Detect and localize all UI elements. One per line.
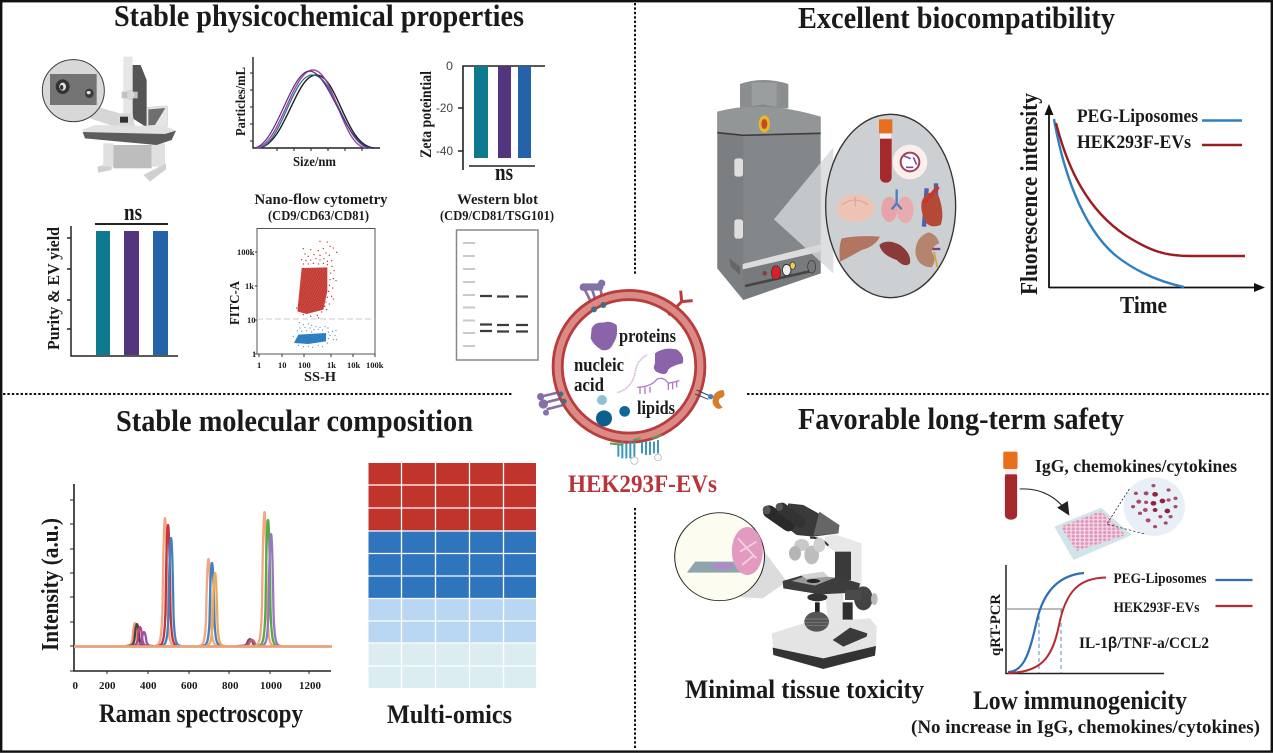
chart: nano-flow cytometry scatter: 100k [237,247,255,257]
central element: HEK293F extracellular vesicle: acid [574,375,604,396]
central element: HEK293F extracellular vesicle: lipids [637,398,675,419]
central element: HEK293F extracellular vesicle: HEK293F-EVs [568,471,717,498]
icon: light microscope [763,503,878,669]
transmembrane proteins: bottom [610,435,662,464]
chart: qRT-PCR amplification curves: HEK293F-EVs [1114,600,1200,616]
chart: western blot [440,192,554,360]
chart: zeta potential bars: -40 [436,144,453,158]
chart: nano-flow cytometry scatter: 100k [366,360,384,370]
protein blob 1 [591,322,617,350]
heading: stable molecular composition: Stable molecular composition [116,403,473,438]
receptor anchors [558,302,606,404]
chart: zeta potential bars [418,59,545,186]
chart: purity and EV yield bars [44,200,178,356]
chart: particle size distribution: Size/nm [293,155,336,170]
chart: western blot: (CD9/CD81/TSG101) [440,208,554,223]
chart: multi-omics heatmap: Multi-omics [387,700,512,729]
chart: nano-flow cytometry scatter: 10 [278,360,286,370]
chart: nano-flow cytometry scatter: FITC-A [228,280,243,325]
chart: raman spectroscopy: Raman spectroscopy [99,699,303,728]
chart: qRT-PCR amplification curves [988,565,1252,674]
chart: nano-flow cytometry scatter: Nano-flow cytometry [254,192,388,208]
chart: fluorescence intensity decay: PEG-Liposomes [1077,107,1198,127]
chart: nano-flow cytometry scatter: (CD9/CD63/CD81) [268,208,369,223]
chart: western blot: Western blot [457,192,538,208]
chart: nano-flow cytometry scatter: 10 [247,315,256,325]
chart: multi-omics heatmap [368,463,536,729]
receptor: top left [580,280,605,310]
chart: zeta potential bars: Zeta poteintial [418,71,435,158]
chart: purity and EV yield bars: Purity & EV yield [44,226,63,350]
chart: raman spectroscopy: 0 [72,680,78,692]
chart: nano-flow cytometry scatter: 1k [327,360,336,370]
caption: low immunogenicity: Low immunogenicity [973,686,1187,715]
RNA hairpin [637,378,679,394]
caption: minimal tissue toxicity: Minimal tissue toxicity [685,675,924,704]
chart: zeta potential bars: 0 [446,59,453,73]
lipid droplets [596,395,630,426]
icon: electron microscope with particle inset [42,57,176,182]
chart: fluorescence intensity decay [1017,93,1265,319]
chart: fluorescence intensity decay: HEK293F-EVs [1077,133,1191,153]
heading: excellent biocompatibility: Excellent biocompatibility [798,0,1115,35]
chart: raman spectroscopy: 1200 [299,680,322,692]
chart: raman spectroscopy: Intensity (a.u.) [38,518,64,651]
central element: HEK293F extracellular vesicle: nucleic [574,355,624,376]
nucleic acid strand [617,355,647,393]
icon: in vivo imaging machine with organs inset [717,80,956,300]
panel: favorable long-term safety [675,401,1260,738]
chart: raman spectroscopy: 400 [140,680,157,692]
chart: raman spectroscopy: 200 [99,680,116,692]
chart: zeta potential bars: ns [495,160,513,186]
chart: nano-flow cytometry scatter: SS-H [304,370,336,385]
chart: nano-flow cytometry scatter: 10k [347,360,360,370]
chart: qRT-PCR amplification curves: qRT-PCR [988,594,1004,656]
chart: raman spectroscopy: 1000 [260,680,282,692]
chart: nano-flow cytometry scatter [228,192,388,385]
chart: fluorescence intensity decay: Fluorescence intensity [1017,93,1043,295]
central element: HEK293F extracellular vesicle [537,280,724,498]
chart: raman spectroscopy: 600 [181,680,198,692]
assay: blood tube to ELISA plate: IgG, chemokines/cytokines [1035,456,1237,476]
chart: nano-flow cytometry scatter: 1k [245,281,254,291]
heading: favorable long-term safety: Favorable long-term safety [798,401,1124,436]
protein blob 2 [654,349,683,374]
chart: zeta potential bars: -20 [436,101,453,115]
panel: excellent biocompatibility [717,0,1265,319]
chart: qRT-PCR amplification curves: PEG-Liposomes [1114,571,1207,587]
chart: fluorescence intensity decay: Time [1120,293,1167,319]
vesicle membrane [558,295,700,438]
central element: HEK293F extracellular vesicle: proteins [619,326,676,347]
chart: qRT-PCR amplification curves: IL-1β/TNF-a/CCL2 [1079,635,1209,652]
chart: raman spectroscopy: 800 [222,680,239,692]
chart: raman spectroscopy [38,484,332,728]
caption: no increase in IgG, chemokines/cytokines: (No increase in IgG, chemokines/cytokines) [911,717,1260,738]
panel: stable molecular composition [38,403,536,729]
chart: purity and EV yield bars: ns [124,200,142,226]
chart: particle size distribution [234,57,380,170]
chart: nano-flow cytometry scatter: 100 [298,360,311,370]
receptor: right orange ligand [695,390,724,409]
receptor: left [537,392,563,416]
chart: nano-flow cytometry scatter: 1 [252,349,256,359]
chart: particle size distribution: Particles/mL [234,67,249,136]
antibody: top right [668,291,693,315]
icon: tissue slide inset [675,513,787,601]
assay: blood tube to ELISA plate [1003,452,1237,560]
chart: nano-flow cytometry scatter: 1 [257,360,261,370]
panel: stable physicochemical properties [42,0,554,385]
